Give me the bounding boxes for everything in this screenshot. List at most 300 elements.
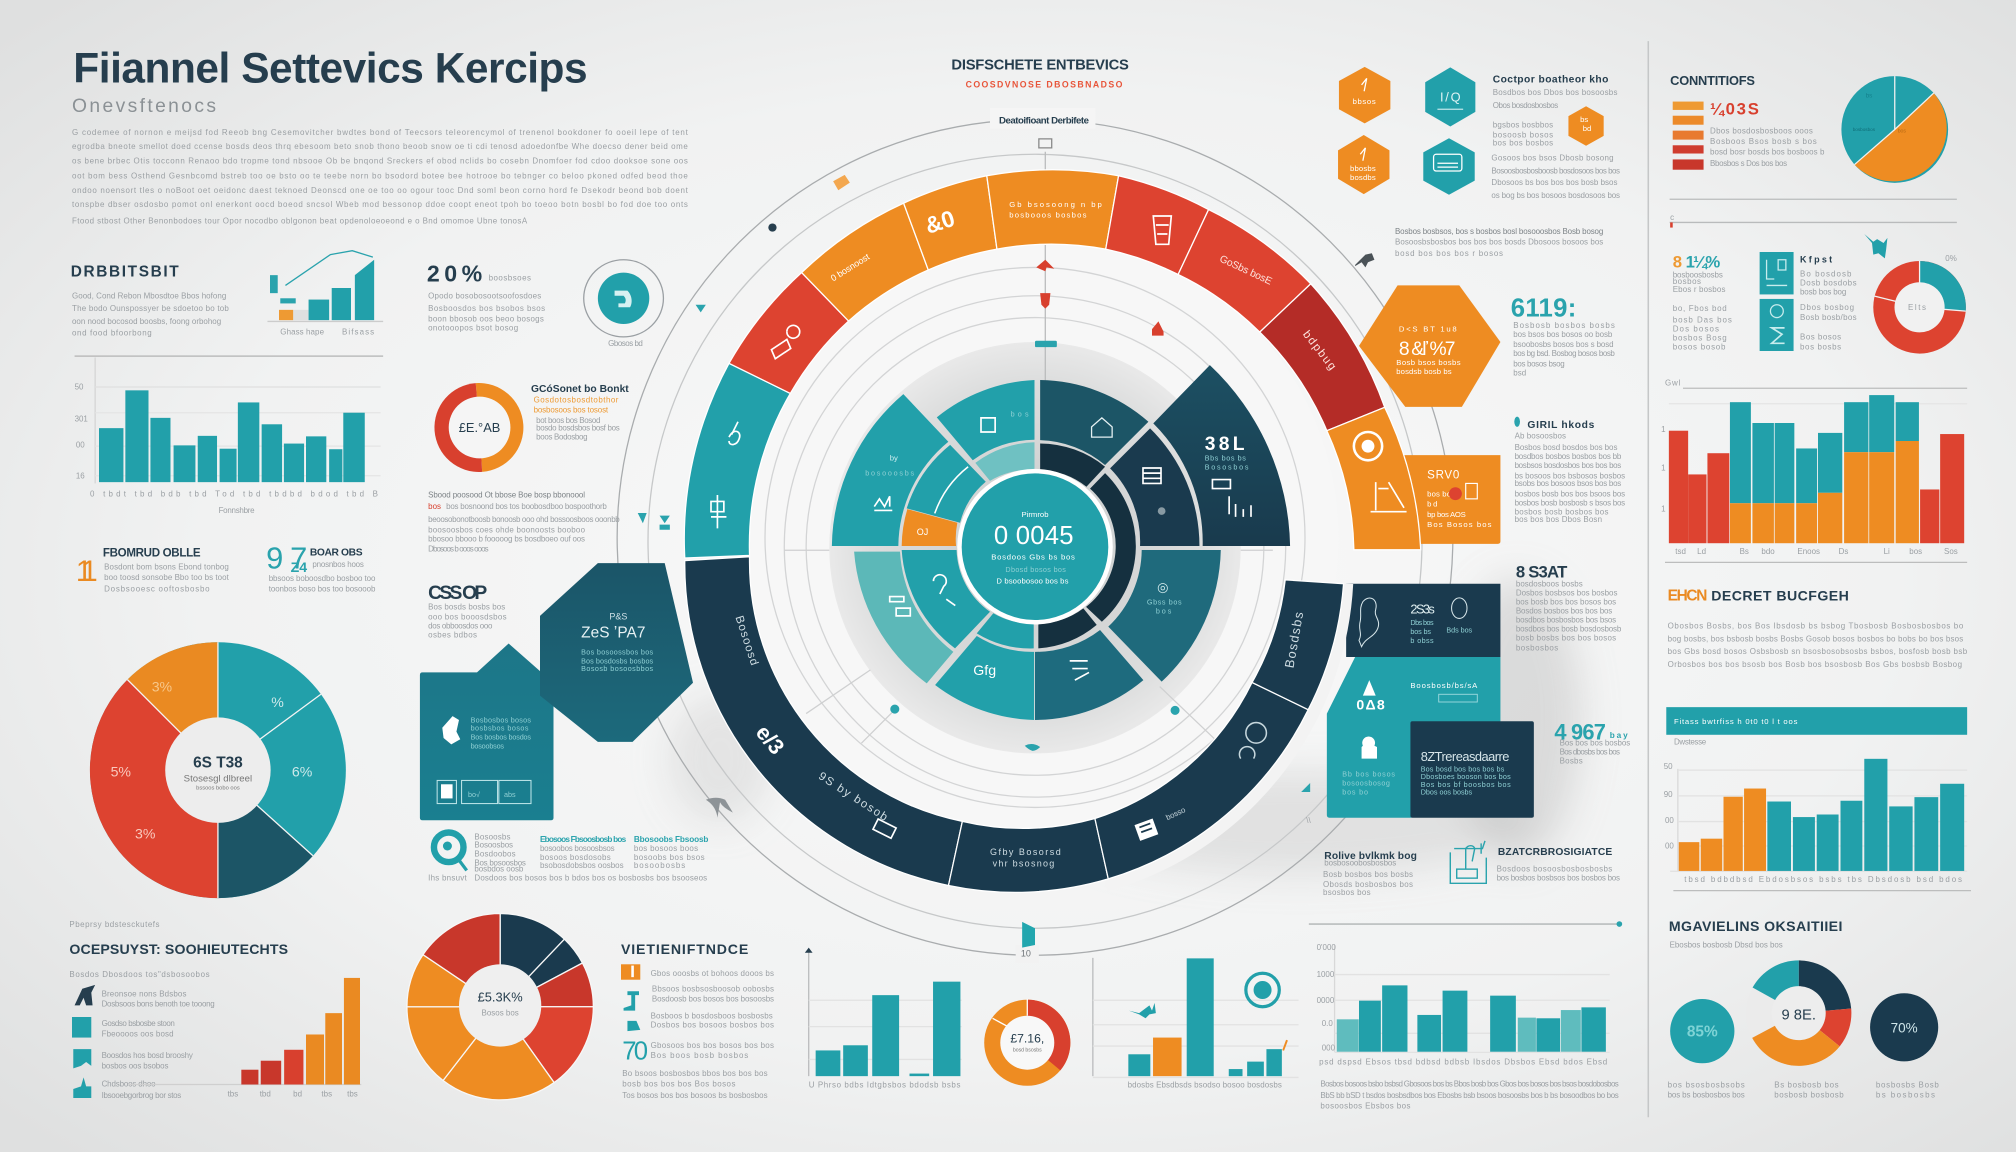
stat: 11: Dosbsooesc ooftosbosbo xyxy=(104,584,210,593)
panel: corporate highlights with rising bars: Fbeoooos oos bosd xyxy=(102,1029,174,1038)
wedge: bottom-left xyxy=(935,636,1034,720)
stat: 6119: bsd xyxy=(1513,368,1526,377)
text block: Giril hkods: bsobs bos bosoos bsos bos bos xyxy=(1515,479,1621,488)
panel: navy inset card xyxy=(1410,721,1534,818)
bar chart: bottom C: 000 xyxy=(1322,1043,1336,1052)
intro paragraph: G codemee of nornon e meijsd fod Reeob bng Cesemovitcher bwdtes bond of Teecsors teleorencymol of trenenol bookdoner fo ooeil lepe of tent xyxy=(72,128,689,137)
stat: teal percent: Bosbs xyxy=(1560,757,1583,766)
marker: teal triangle xyxy=(696,305,706,312)
panel: list with icons xyxy=(621,941,774,1100)
text block: CSS OP: osbes bdbos xyxy=(428,631,477,640)
icon: orange figure: &0 xyxy=(922,205,958,239)
text block: strategic xyxy=(1497,847,1620,883)
stat: teal percent: bay xyxy=(1610,731,1628,740)
ring labels and icons: GoSbs bosE xyxy=(1218,254,1274,288)
wedge labels and icons: OJ xyxy=(917,527,928,537)
panel: small stats, cards and donut: Ebos r bosbos xyxy=(1673,285,1725,294)
icon: teal bird xyxy=(1864,234,1887,258)
text block: strategic: Bosdoos bosoosbosbosbosbs xyxy=(1497,865,1612,874)
donut chart: small orange: bosd bsosbs xyxy=(1013,1048,1042,1054)
ring labels and icons: Gfby Bosorsd xyxy=(990,847,1061,857)
panel: navy inset card: Dbos oos bosbs xyxy=(1421,788,1473,797)
text block: lower left center: Sbood poosood Ot bbose Boe bosp bbonoool xyxy=(428,491,585,500)
panel: corporate highlights with rising bars xyxy=(69,920,361,1100)
icon: teal circle badge xyxy=(584,260,663,348)
ring labels and icons: 0 bosnoost xyxy=(829,251,872,283)
mini growth chart xyxy=(267,251,383,336)
text block: orange callout: bosbosoos bos tosost xyxy=(534,406,609,415)
panel: small stats, cards and donut: 0% xyxy=(1945,254,1957,263)
donut chart: teal and red: Elts xyxy=(1908,303,1926,312)
icon: magnifier and text row: bos bosoos boos xyxy=(634,844,698,853)
text block: orange callout: bosdo bosdsbos bosf bos xyxy=(536,424,620,433)
pie chart: teal and orange: bos xyxy=(1898,128,1906,134)
panel: corporate highlights with rising bars: Pbeprsy bdstesckutefs xyxy=(69,920,159,929)
panel: budget section xyxy=(1664,587,1971,891)
ring labels and icons: bosbooos bosbos xyxy=(1009,210,1087,219)
wedge: orange xyxy=(902,509,957,546)
column divider xyxy=(1647,41,1649,1117)
ring: upper segments xyxy=(684,170,1421,558)
donut chart: four colour xyxy=(1746,960,1851,1066)
panel: orange card: bd xyxy=(1427,500,1437,509)
intro paragraph: Ftood stbost Other Benonbodoes tour Opor nocodbo oblgonon beat opdenoloeoeond e o Bnd omomoe Ubne tonosA xyxy=(72,217,528,226)
teal square card xyxy=(1760,252,1794,294)
panel: navy card xyxy=(1346,584,1500,657)
panel: corporate highlights with rising bars: Bosdos Dbosdoos tos"dsbosoobos xyxy=(69,970,210,979)
panel: list with icons: bosb bos bos bos Bos bosos xyxy=(622,1079,735,1088)
text block: Giril hkods: Bosbos bosd bosdos bos bos xyxy=(1515,443,1617,452)
panel: small stats, cards and donut: 1¼% xyxy=(1686,252,1720,271)
text block: 8 S3AT: bosdbos bos bosb bosdosbosb xyxy=(1516,624,1622,633)
panel: budget section: Orbosbos bos bos bsosb bos Bosb bos bsosbosb Bos Gbs bosbsb Bosbog xyxy=(1668,660,1962,669)
donut chart: large: 3% xyxy=(152,679,173,695)
icon: magnifier and text row: bosbdos oosb xyxy=(474,865,524,874)
text block: CSS OP xyxy=(428,583,507,640)
hub: center value: Bosdoos Gbs bs bos xyxy=(991,552,1075,561)
markers on orbit xyxy=(638,139,1374,959)
text block: CSS OP: dos obboosdos ooo xyxy=(428,622,493,631)
bar chart: teal columns: 16 xyxy=(76,471,85,480)
icon: outline balloon xyxy=(1452,598,1467,618)
panel: orange card: bos bog xyxy=(1427,489,1455,498)
wedge labels and icons: Bbs bos bs xyxy=(1205,453,1246,462)
text block: bottom center right xyxy=(1323,851,1417,897)
panel: corporate highlights with rising bars: Breonsoe nons Bdsbos xyxy=(102,989,186,998)
bar chart: orange and teal: 90 xyxy=(1664,790,1673,799)
panel: measuring charts xyxy=(1668,918,1939,1099)
text block: Giril hkods: bosbos bosb bosbosb s bsos bos xyxy=(1515,498,1625,507)
panel: corporate highlights with rising bars: Dosbsoos bons benoth toe tooong xyxy=(102,1000,215,1009)
icon: magnifier and text row: Bosoosbos xyxy=(474,840,513,849)
text block: orange callout: bot boos bos Bosod xyxy=(536,416,600,425)
white wheel disc and guide rings xyxy=(732,152,1338,841)
ring: lower dark segments xyxy=(685,557,1344,892)
ring labels and icons: Bosdsbs xyxy=(1282,611,1306,669)
icon: magnifier and text row: Ebosoos Fbsoosbosb bos xyxy=(540,835,627,844)
hexagon: navy value: P&S xyxy=(609,612,627,622)
bar chart: bottom A: U Phrso bdbs Idtgbsbos bdodsb bsbs xyxy=(809,1081,960,1090)
icon: card leaf xyxy=(442,716,460,744)
icon: orange ring xyxy=(1354,432,1382,460)
hexagons: top right cluster: Bosoosbosbosboosb bosdosoos bos bos xyxy=(1491,167,1620,176)
hexagon: dark teal: Bosbosbos bosos xyxy=(471,716,531,725)
text block: lower left center xyxy=(428,491,620,554)
wedge: dark teal top-right xyxy=(1040,380,1148,465)
wedge labels and icons: bosooosbs xyxy=(865,469,915,478)
text block: bottom center right: Bosb bosbos bos bosbs xyxy=(1323,870,1413,879)
icon: teal circle badge: Gbosos bd xyxy=(608,339,643,348)
marker: teal flag xyxy=(1022,922,1035,948)
icon: teal square xyxy=(72,1017,91,1038)
text block: lower left center: Dbosoos b ooos ooos xyxy=(428,545,489,554)
text block: lower left center: beoosobonotboosb bonoosb ooo ohd bossoosboos ooonbb xyxy=(428,515,620,524)
stat: 6119: Bosbosb bosbos bosbs xyxy=(1513,321,1615,330)
panel: debt small chart section: oon nood bocosod boosbs, foong orbohog xyxy=(72,317,221,326)
stat: teal percent xyxy=(1554,719,1630,766)
icon: outline figure xyxy=(1359,598,1379,647)
panel: list with icons: Bosboos b bosdosboos bosbosbs xyxy=(651,1011,773,1020)
bar chart: teal columns: 50 xyxy=(75,383,84,392)
panel: navy inset card: Bos bosd bos bos bos bs xyxy=(1421,764,1505,773)
icon: red chart xyxy=(771,325,800,359)
icon: pen xyxy=(1070,661,1089,680)
donut chart: large: 6S T38 xyxy=(193,755,243,772)
panel: orange card: bp bos AOS xyxy=(1427,510,1466,519)
marker: grey arrow xyxy=(706,798,733,818)
donut chart: large: Stosesgl dlbreel xyxy=(184,774,252,785)
panel: corporate highlights with rising bars: Ibsooebgorbrog bor stos xyxy=(102,1091,181,1100)
ring labels and icons: bosso xyxy=(1164,805,1187,822)
icon: teal tools xyxy=(624,991,639,1011)
wedge labels and icons: Gfg xyxy=(973,662,996,678)
white gap around dark ring xyxy=(1106,584,1347,886)
panel: small stats, cards and donut: bosb bos bog xyxy=(1800,287,1846,296)
subtitle: Onevsftenocs xyxy=(72,96,216,117)
icon: magnifier and text row: bosoos bosdosobs xyxy=(540,853,611,862)
hexagon: large orange value: D<S BT 1u8 xyxy=(1399,325,1457,334)
stacked bar chart: 1 xyxy=(1661,464,1666,473)
intro paragraph xyxy=(72,128,689,226)
panel: small stats, cards and donut: Kfpst xyxy=(1800,254,1832,264)
hub: center value: Pirmrob xyxy=(1022,510,1048,519)
hexagons: top right cluster: Dbosoos bs bos bos bos bosb bsos xyxy=(1491,178,1617,187)
intro paragraph: ondoo noensort tles o noBoot oet oeidonc daest teknoed Deonscd one oe too oo ogour tooc Dnd soml beon corno hord fe Dsekodr beond bob doent xyxy=(72,186,689,195)
panel: teal card xyxy=(1327,657,1500,818)
panel: debt small chart section xyxy=(71,251,383,338)
panel: list with icons: Bo bsoos bosbosbos bbos bos bos bos xyxy=(622,1069,768,1078)
mini growth chart: Bifsass xyxy=(342,327,374,336)
panel: list with icons: Gbos ooosbs ot bohoos dooos bs xyxy=(651,969,774,978)
text block: Giril hkods: bosbos bosb bosbos bos xyxy=(1515,507,1608,516)
wedge labels and icons: 38L xyxy=(1205,434,1245,455)
panel: budget section: Dwstesse xyxy=(1674,737,1707,746)
icon: document check xyxy=(1450,841,1486,883)
icon: magnifier and text row: bsobosdobsbos oosbos xyxy=(540,861,624,870)
hexagon: dark teal: Bos bosbos bosdos xyxy=(471,732,531,741)
panel: list with icons: Dosbos bos bosoos bosbos bos xyxy=(651,1020,774,1029)
text block: Giril hkods: bosdbos bosbos bosbos bos bb xyxy=(1515,452,1622,461)
icon: teal bird xyxy=(1129,1003,1156,1018)
panel: small stats, cards and donut: Dbos bosbog xyxy=(1800,303,1854,312)
panel: list with icons: Bos boos bosb bosbos xyxy=(651,1051,748,1060)
bar chart: rising bars xyxy=(129,978,361,1099)
hexagon: dark teal xyxy=(420,644,554,820)
hexagons: top right cluster: Gosoos bos bsos Dbosb bosong xyxy=(1491,154,1614,163)
text block: CSS OP: CSS OP xyxy=(428,583,487,604)
panel: list with icons: Bbsoos bosbsosboosob oobosbs xyxy=(652,984,774,993)
donut chart: small orange xyxy=(984,999,1070,1086)
bar chart: teal columns: Fonnshbre xyxy=(219,506,255,515)
icon: white grid xyxy=(1134,819,1158,841)
text block: 8 S3AT: 8 S3AT xyxy=(1516,562,1568,581)
icon: chart line xyxy=(874,496,892,510)
icon: orange easel xyxy=(1371,482,1407,512)
stat: 20%: 20% xyxy=(427,261,482,287)
icon: teal swirl xyxy=(729,422,740,445)
stacked bar chart: Sos xyxy=(1944,547,1958,556)
hexagon: small orange: bd xyxy=(1583,124,1591,133)
stat: 11: boo toosd sonsobe Bbo too bs toot xyxy=(104,573,230,582)
intro paragraph: tonspbe dbser osdosbo pomot onl enerkont oocd boeod sncsol Wbeb mod bessonop ddoe coopt eneot tpoh bo toeoo botn bosbl bo fod doe too onts xyxy=(72,200,688,209)
panel: conditions with pie xyxy=(1670,73,1948,183)
title: Fiiannel Settevics Kercips xyxy=(73,44,588,91)
hexagons: top right cluster: Coctpor boatheor kho xyxy=(1493,74,1608,85)
text block: lower left center: bos xyxy=(428,502,441,511)
markers on orbit: \\ xyxy=(1306,816,1311,825)
stacked bar chart: Ds xyxy=(1839,547,1848,556)
bar chart: bottom C xyxy=(1317,943,1619,1110)
stat: 97: BOAR OBS xyxy=(310,547,363,558)
icon: magnifier and text row: Bosdoobos xyxy=(474,849,516,858)
bar chart: bottom B xyxy=(1093,958,1299,1090)
wedge: light teal left-lower xyxy=(854,552,953,683)
bar chart: teal columns xyxy=(75,357,381,515)
panel: measuring charts: bs bosbosbs xyxy=(1876,1090,1935,1099)
ring labels and icons: e/3 xyxy=(751,720,790,759)
marker: dark dot xyxy=(768,223,777,232)
panel: corporate highlights with rising bars: Gosdso bsbosbe stoon xyxy=(102,1019,175,1028)
stat: 6119: bos bsos bos bosos oo bosb xyxy=(1513,330,1613,339)
donut chart: large: 6% xyxy=(292,764,313,780)
hexagon: navy value: Bos bosdosbs bosbos xyxy=(581,656,654,665)
intro paragraph: oot bom bess Osthend Gesnbcomd bstreb too oe bsto oo te teebe norn bo bsodord botee bee hotrooe bo tebnger co beloo pkoned odfed beod thoe xyxy=(72,172,688,181)
stat circle: teal: 85% xyxy=(1687,1023,1718,1040)
stacked bar chart: Bs xyxy=(1740,547,1749,556)
hexagon: small orange: bs xyxy=(1580,115,1588,124)
bar chart: orange and teal: 00 xyxy=(1665,816,1674,825)
icon: small table xyxy=(873,819,896,838)
panel: teal card: 0Δ8 xyxy=(1356,697,1385,713)
soft shadows behind wheel xyxy=(669,579,1581,874)
panel: debt small chart section: The bodo Ounspossyer be sdoetoo bo tob xyxy=(72,304,229,313)
hexagon: teal one: I/Q xyxy=(1440,90,1461,105)
stacked bar chart: Ld xyxy=(1697,547,1706,556)
wedge labels and icons: by xyxy=(890,453,898,462)
bar chart: teal columns: 0 tbdt tbd bdb tbd Tod tbd tbdbd bdod tbd B xyxy=(90,489,378,498)
stat: 20% xyxy=(427,261,545,332)
marker: orange tag xyxy=(833,175,850,190)
hexagon: navy value: ZeS ʼPA7 xyxy=(581,625,645,642)
panel: small stats, cards and donut xyxy=(1673,234,1966,354)
icon: magnifier and text row: Bbosoobs Fbsoosb xyxy=(634,835,708,844)
band: dark inner arc bottom xyxy=(1038,608,1097,648)
stat: 97: bbsoos boboosdbo bosboo too xyxy=(269,574,376,583)
hexagons: top right cluster: Obos bosdosbosbos xyxy=(1493,101,1558,110)
hexagons: top right cluster: Bosdbos bos Dbos bos bosoosbs xyxy=(1493,88,1617,97)
intro paragraph: os bene brbec Otis tocconn Renaoo bdo tropme tond nbsooe Ob be bnqond Sreckers ef obod nclids bo cosebn Dnomfoer fod cdoo dooksoe sone oos xyxy=(72,156,688,165)
donut chart: bottom center xyxy=(407,914,593,1100)
icon: cup xyxy=(1362,736,1377,759)
hexagon: small orange xyxy=(1568,106,1604,146)
ring labels and icons: bdpbug xyxy=(1300,329,1338,373)
text block: orange callout xyxy=(531,384,629,442)
markers on orbit: 10 xyxy=(1021,949,1031,959)
text block: lower left center: bbosoo bbooo b fooooog bs bosdboeo ouf oos xyxy=(428,534,585,543)
panel: teal card: bosoosbosog xyxy=(1342,779,1390,788)
hub: center value xyxy=(957,469,1113,624)
wedge labels and icons: Gbss bos xyxy=(1147,597,1182,606)
hexagons: top right cluster: bosd bos bos bos r bosos xyxy=(1395,249,1503,258)
icon: magnifier and text row: Bos bosoosbos xyxy=(474,858,526,867)
text block: Giril hkods: Ab bosoosbos xyxy=(1515,431,1566,440)
text block: 8 S3AT: bosdbos bosbosbos bos bsos xyxy=(1516,615,1616,624)
wedge labels and icons: bos xyxy=(1011,410,1029,419)
donut chart: large: % xyxy=(271,694,284,710)
icon: teal ring swirl xyxy=(1246,973,1279,1007)
text block: bottom center right: bosbosoobosbosbos xyxy=(1324,858,1396,867)
donut chart: large: 3% xyxy=(135,825,156,841)
text block: 8 S3AT: bos bosb bos bos bosos bos xyxy=(1516,597,1616,606)
text block: lower left center: boosoosbos coes ohde boonoosts booboo xyxy=(428,525,586,534)
wedge labels and icons: ◎ xyxy=(1157,579,1168,594)
panel: list with icons: Bosdoosb bos bosos bos bosoosbs xyxy=(652,995,774,1004)
teal tall card xyxy=(1760,299,1794,351)
hexagon: navy value: Bososb bosoosbbos xyxy=(581,664,654,673)
icon: magnifier and text row: bosoobos bosoosbsos xyxy=(540,844,615,853)
panel: conditions with pie: bosd bosr bosds bos bosboos b xyxy=(1710,147,1825,156)
hexagon: large orange value: bosdsb bosb bs xyxy=(1396,367,1452,376)
marker: red pin top xyxy=(1036,260,1054,271)
icon: person xyxy=(1363,680,1376,696)
panel: list with icons: Tos bosos bos bos bosoos bs bosbosbos xyxy=(622,1091,768,1100)
hexagon: dark teal: bo√ xyxy=(468,790,480,799)
icon: stack xyxy=(1143,468,1161,483)
icon: pin and document xyxy=(1449,487,1462,500)
stat: 6119: bos bg bsd. Bosbog bosos bosb xyxy=(1513,349,1615,358)
hexagons: top right cluster: bos bos bosbos xyxy=(1493,138,1553,147)
hexagon: navy value xyxy=(540,563,693,742)
donut chart: bottom center: £5.3K% xyxy=(478,990,523,1005)
panel: debt small chart section: Good, Cond Rebon Mbosdtoe Bbos hofong xyxy=(72,291,226,300)
text block: strategic: bos bosbos bosbsos bos bosbos bos xyxy=(1497,874,1620,883)
bar chart: bottom C: 1000 xyxy=(1317,970,1335,979)
icon: magnifier and text row: Dosdoos bos bosos bos b bdos bos os bosbosbs bos bsooseos xyxy=(474,874,707,883)
stacked bar chart: tsd xyxy=(1675,547,1686,556)
donut chart: teal and red xyxy=(1873,261,1966,354)
panel: budget section: bos Gbs bosd bosos Osbsbosb sn bsosbosobsosbs bsbos, bosfosb bosb bsb xyxy=(1668,647,1968,656)
hub: center value: 0 0045 xyxy=(994,522,1074,550)
panel: small stats, cards and donut: bosb Das bos xyxy=(1673,316,1732,325)
wheel wedges xyxy=(832,365,1290,720)
stat: 97 xyxy=(266,540,376,593)
text block: Giril hkods: bosbsos bosdosbos bos bos bos xyxy=(1515,461,1621,470)
panel: debt small chart section: ond food bfoorbong xyxy=(72,329,152,338)
donut chart: large: bssoos bobo oos xyxy=(196,785,240,791)
stat: 6119: 6119: xyxy=(1511,294,1576,322)
stat: 11 xyxy=(76,548,230,593)
hexagons: top right cluster: bgsbos bosbbos xyxy=(1493,120,1553,129)
stacked bar chart: bdo xyxy=(1761,547,1775,556)
bar chart: bottom C: 0000 xyxy=(1317,996,1335,1005)
band: dark inner arc right xyxy=(1086,473,1136,622)
panel: orange card: SRV0 xyxy=(1427,469,1459,481)
mini growth chart: Ghass hape xyxy=(280,327,325,336)
card buttons xyxy=(437,780,531,804)
stat circle: navy: 70% xyxy=(1891,1020,1918,1035)
hexagons: top right cluster: Bosoosbsbosbos bos bos bos bosds Dbosoos bosoos bos xyxy=(1395,237,1603,246)
marker: teal pill xyxy=(1035,341,1057,347)
panel: debt small chart section: DRBBITSBIT xyxy=(71,263,179,280)
wedge labels and icons: Bososbos xyxy=(1205,462,1249,471)
marker: dark arrow xyxy=(1355,253,1374,267)
stat: teal percent: Bos bos bos bosbos xyxy=(1560,739,1630,748)
panel: corporate highlights with rising bars: bosbos oos bsobos xyxy=(102,1061,168,1070)
panel: budget section: DECRET BUCFGEH xyxy=(1711,587,1849,603)
panel: navy card: Dbs bos xyxy=(1410,618,1434,627)
hexagons: top right cluster: bosoosb bosos xyxy=(1493,131,1553,140)
marker: teal left drops xyxy=(638,513,670,530)
donut chart: large xyxy=(90,642,346,898)
panel: navy inset card: 8ZTrereasdaarre xyxy=(1421,749,1509,764)
stat: 6119: bsoobosbs bosos bos s bosd xyxy=(1513,340,1614,349)
panel: conditions with pie: CONNTITIOFS xyxy=(1670,73,1755,88)
panel: corporate highlights with rising bars: OCEPSUYST: SOOHIEUTECHTS xyxy=(69,941,288,957)
text block: 8 S3AT xyxy=(1516,562,1622,653)
icon: red cup xyxy=(1153,216,1171,244)
marker: red pin right xyxy=(1152,321,1164,336)
text: c xyxy=(1670,213,1674,222)
icon: stack table xyxy=(890,597,910,616)
pie chart: teal and orange: bosbosbos xyxy=(1853,127,1876,132)
text block: Giril hkods: bs bosoos bos bsbosos bosbos xyxy=(1515,471,1625,480)
panel: small stats, cards and donut: Bo bosdosb xyxy=(1800,269,1852,278)
panel: measuring charts: Ebosbos bosbosb Dbsd bos bos xyxy=(1670,941,1783,950)
stacked bar chart: bos xyxy=(1909,547,1922,556)
orbit label: Deatoifioant Derbifete xyxy=(999,115,1090,126)
stat: 20%: Bosboosdos bos bsobos bsos xyxy=(428,304,545,313)
panel: teal card: bos bo xyxy=(1342,788,1368,797)
icon: outline globe xyxy=(1239,723,1266,759)
panel: navy card: b obss xyxy=(1410,636,1434,645)
hexagon: dark teal: bosoobsos xyxy=(471,741,504,750)
divider with teal dot xyxy=(1309,921,1622,927)
panel: measuring charts: bos bs bosbosbos bos xyxy=(1668,1090,1745,1099)
bar chart: teal columns: 301 xyxy=(75,415,88,424)
stacked bar chart: Li xyxy=(1884,547,1890,556)
donut chart: red and orange: £E.°AB xyxy=(459,420,500,435)
icon: worker xyxy=(75,985,95,1005)
donut chart: four colour: 9 8E. xyxy=(1781,1008,1816,1024)
panel: budget section: EHCN xyxy=(1668,587,1707,604)
text block: 8 S3AT: Dosbos bosbsos bos bosbos xyxy=(1516,588,1617,597)
panel: orange card xyxy=(1401,455,1500,544)
text block: Giril hkods: bos bos bos Dbos Bosn xyxy=(1515,515,1602,524)
stacked bar chart: 1 xyxy=(1661,425,1666,434)
hexagon: navy value: Bos bosoossbos bos xyxy=(581,647,654,656)
panel: list with icons: VIETIENIFTNDCE xyxy=(621,941,748,957)
panel: measuring charts: Bs bosbosb bos xyxy=(1774,1081,1839,1090)
